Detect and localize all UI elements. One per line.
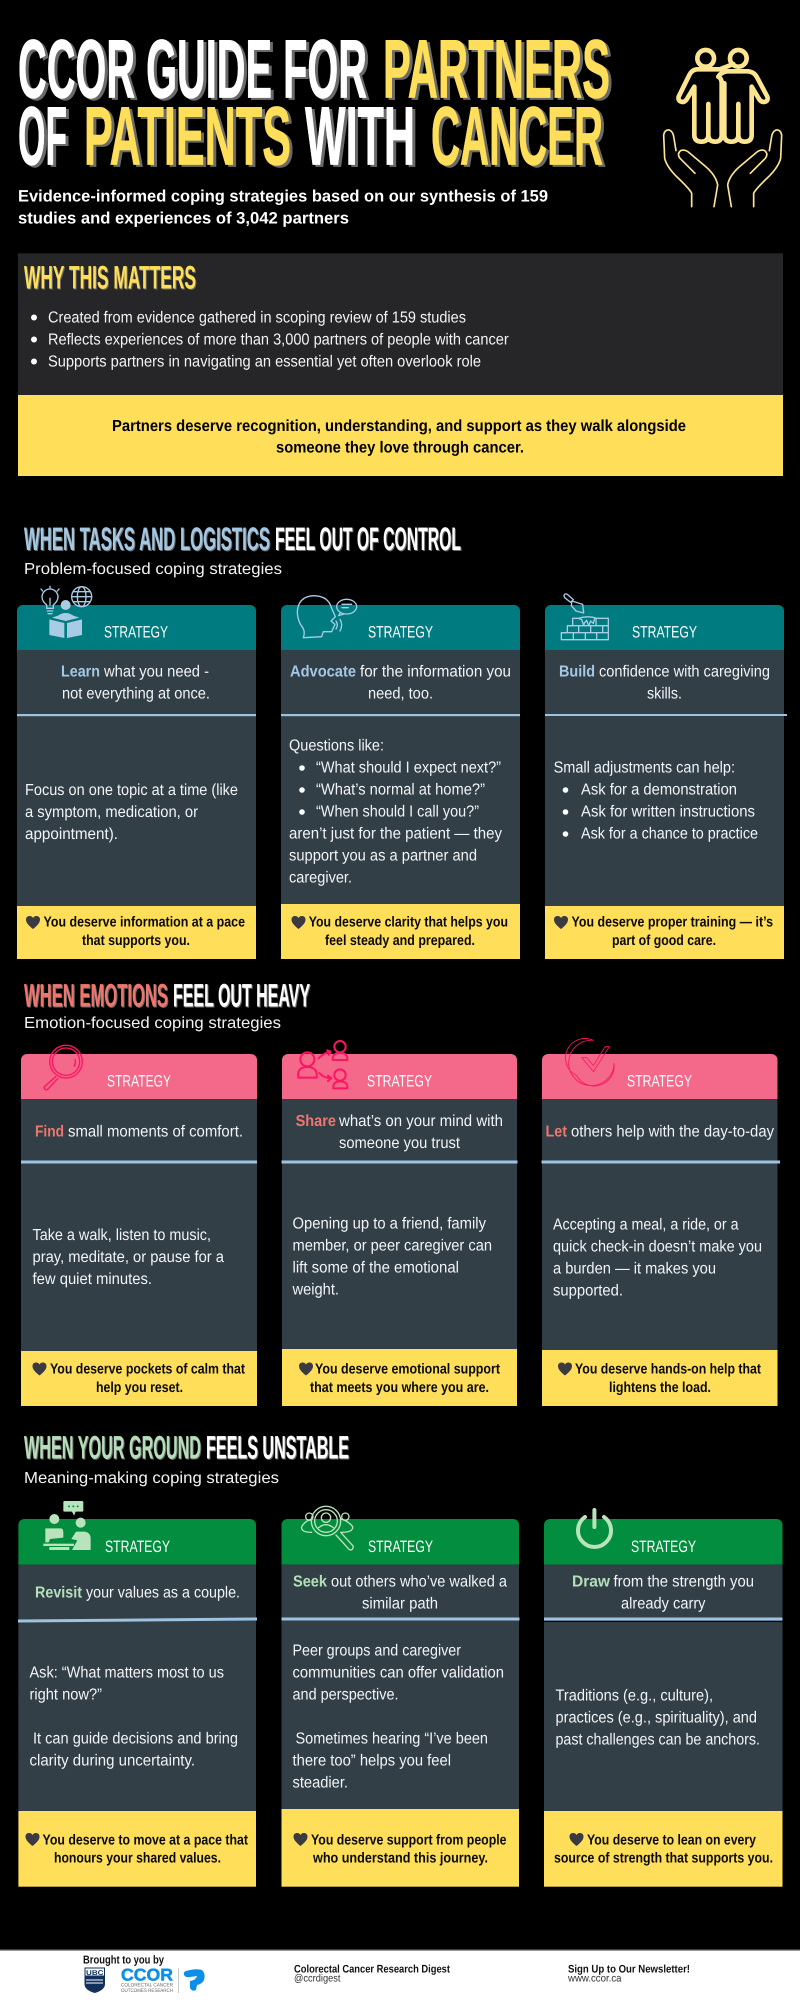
panel: advocate	[281, 596, 520, 959]
card title	[559, 664, 770, 703]
logo: colon icon	[184, 1969, 205, 1991]
card body	[292, 1643, 504, 1792]
card title: someone you trust	[339, 1135, 461, 1152]
card footer: You deserve proper training — it’s	[572, 915, 773, 931]
section heading: tasks and logistics: WHEN TASKS AND LOGISTICS	[24, 521, 270, 557]
card footer: who understand this journey.	[312, 1850, 488, 1866]
card footer: You deserve pockets of calm that	[50, 1362, 245, 1378]
callout: partners deserve recognition: Partners deserve recognition, understanding, and support as they walk alongside	[112, 418, 686, 435]
card title: small moments of comfort.	[68, 1124, 243, 1141]
strategy label: STRATEGY	[627, 1073, 692, 1091]
title	[18, 22, 610, 182]
icon: speaking head	[297, 596, 357, 638]
card body: Traditions (e.g., culture),	[556, 1687, 713, 1704]
card title: already carry	[621, 1596, 706, 1613]
panel: learn	[17, 586, 256, 959]
subtitle: Evidence-informed coping strategies based on our synthesis of 159	[18, 188, 548, 206]
logo: UBC shield	[84, 1968, 105, 1993]
card title	[61, 664, 210, 703]
logo: CCOR wordmark	[121, 1966, 173, 1994]
card title	[290, 664, 511, 703]
card body	[25, 782, 238, 843]
card footer: You deserve emotional support	[315, 1362, 500, 1378]
card title: for the information you	[360, 664, 511, 681]
card body: pray, meditate, or pause for a	[32, 1249, 224, 1266]
card title	[572, 1574, 754, 1613]
title: WITH	[305, 90, 415, 182]
card title: Revisit	[35, 1585, 83, 1602]
card body: caregiver.	[289, 870, 352, 887]
card body: Small adjustments can help:	[554, 760, 735, 777]
icon: book, bulb and globe	[41, 586, 92, 638]
card body: weight.	[292, 1282, 339, 1299]
card body	[554, 760, 758, 843]
card body: a burden — it makes you	[553, 1261, 716, 1278]
card footer	[545, 906, 784, 959]
callout: partners deserve recognition	[18, 395, 783, 476]
card body: “What’s normal at home?”	[316, 782, 485, 799]
logo: UBC shield: UBC	[86, 1970, 104, 1977]
card footer: that meets you where you are.	[310, 1380, 489, 1396]
card title: from the strength you	[614, 1574, 754, 1591]
panel: share	[282, 1041, 518, 1406]
strategy label: STRATEGY	[368, 1538, 433, 1556]
card body: there too” helps you feel	[292, 1753, 451, 1770]
card footer: honours your shared values.	[54, 1850, 221, 1866]
card body: few quiet minutes.	[32, 1271, 152, 1288]
panel: why this matters	[18, 253, 783, 395]
card body	[289, 738, 502, 887]
card body: Opening up to a friend, family	[292, 1216, 486, 1233]
strategy label: STRATEGY	[107, 1073, 171, 1091]
subtitle: studies and experiences of 3,042 partners	[18, 210, 349, 228]
card body	[556, 1687, 760, 1748]
brought to you by: Brought to you by	[83, 1954, 164, 1966]
panel: let	[542, 1038, 780, 1406]
card footer: lightens the load.	[609, 1380, 711, 1396]
card footer: part of good care.	[612, 933, 716, 949]
card body: clarity during uncertainty.	[30, 1753, 195, 1770]
footer band	[0, 1949, 800, 2000]
card body: right now?”	[30, 1687, 102, 1704]
card body: support you as a partner and	[289, 848, 477, 865]
section subtitle: emotion-focused: Emotion-focused coping strategies	[24, 1015, 281, 1032]
card body: quick check-in doesn’t make you	[553, 1239, 762, 1256]
newsletter	[567, 1964, 690, 1985]
card body	[292, 1216, 492, 1299]
card title: others help with the day-to-day	[571, 1124, 774, 1141]
bullet list	[31, 310, 509, 371]
panel: seek	[282, 1506, 520, 1887]
card body	[32, 1227, 224, 1288]
heading: why this matters: WHY THIS MATTERS	[24, 259, 196, 295]
strategy label: STRATEGY	[367, 1073, 432, 1091]
card footer: You deserve support from people	[311, 1832, 506, 1848]
card body: “What should I expect next?”	[316, 760, 501, 777]
panel: build	[545, 594, 787, 959]
card footer	[21, 1351, 257, 1406]
card body: “When should I call you?”	[316, 804, 479, 821]
card footer: You deserve hands-on help that	[575, 1362, 761, 1378]
card footer	[542, 1350, 778, 1406]
digest contact: Colorectal Cancer Research Digest	[294, 1964, 450, 1976]
section subtitle: problem-focused: Problem-focused coping strategies	[24, 561, 282, 578]
card body: Ask: “What matters most to us	[30, 1665, 224, 1682]
card title: need, too.	[368, 686, 433, 703]
title: PATIENTS	[84, 90, 291, 182]
card body: Accepting a meal, a ride, or a	[553, 1217, 739, 1234]
bullet list: Supports partners in navigating an essential yet often overlook role	[48, 354, 481, 371]
card body: member, or peer caregiver can	[292, 1238, 492, 1255]
card title: Draw	[572, 1574, 611, 1591]
icon: power symbol	[578, 1510, 611, 1547]
text: FEELS UNSTABLE	[206, 1429, 349, 1465]
subtitle	[18, 188, 548, 228]
card body: lift some of the emotional	[292, 1260, 459, 1277]
panel: find	[21, 1045, 257, 1406]
icon: two people talking at a desk	[43, 1501, 91, 1550]
card title: not everything at once.	[62, 686, 210, 703]
newsletter: Sign Up to Our Newsletter!	[568, 1964, 690, 1976]
card body: Ask for a chance to practice	[581, 826, 758, 843]
digest contact: @ccrdigest	[294, 1973, 341, 1985]
card title	[293, 1574, 507, 1613]
logo: CCOR wordmark: OUTCOMES RESEARCH	[121, 1988, 173, 1994]
logo: CCOR wordmark: CCOR	[121, 1966, 173, 1984]
card body: appointment).	[25, 826, 118, 843]
icon: partners held in two hands	[664, 50, 782, 207]
panel: draw	[544, 1510, 782, 1887]
icon: searching for people	[302, 1506, 353, 1550]
card body: Ask for written instructions	[581, 804, 755, 821]
card body: supported.	[553, 1283, 623, 1300]
card body: practices (e.g., spirituality), and	[556, 1709, 757, 1726]
card title: what’s on your mind with	[338, 1113, 503, 1130]
card title: Find	[35, 1124, 64, 1141]
card title: Seek	[293, 1574, 327, 1591]
panel: revisit	[18, 1501, 257, 1887]
text: FEEL OUT HEAVY	[173, 978, 310, 1014]
bullet list: Reflects experiences of more than 3,000 partners of people with cancer	[48, 332, 509, 349]
card title: confidence with caregiving	[599, 664, 770, 681]
card footer: You deserve information at a pace	[44, 915, 245, 931]
icon: check mark in circle	[565, 1038, 614, 1086]
card footer	[281, 904, 520, 959]
card body: steadier.	[292, 1775, 348, 1792]
section subtitle: meaning-making: Meaning-making coping strategies	[24, 1470, 279, 1487]
card body: aren’t just for the patient — they	[289, 826, 502, 843]
section heading: emotions: WHEN EMOTIONS	[24, 978, 168, 1014]
card title: Build	[559, 664, 595, 681]
card body: communities can offer validation	[292, 1665, 504, 1682]
card title: skills.	[647, 686, 682, 703]
card body: Focus on one topic at a time (like	[25, 782, 238, 799]
section heading: ground: WHEN YOUR GROUND	[24, 1429, 201, 1465]
card body: It can guide decisions and bring	[33, 1731, 238, 1748]
card title: Learn	[61, 664, 100, 681]
card body: Sometimes hearing “I’ve been	[296, 1731, 488, 1748]
card body: Ask for a demonstration	[581, 782, 737, 799]
logo: CCOR wordmark: COLORECTAL CANCER	[121, 1982, 173, 1988]
card footer	[18, 1811, 256, 1887]
card footer	[282, 1809, 519, 1887]
title: CCOR GUIDE FOR	[18, 22, 367, 116]
card body: a symptom, medication, or	[25, 804, 199, 821]
icon: people sharing	[298, 1041, 347, 1088]
card title	[35, 1585, 240, 1602]
card title: similar path	[362, 1596, 438, 1613]
card footer: You deserve clarity that helps you	[309, 915, 508, 931]
title: OF	[18, 90, 67, 182]
icon: magnifying glass	[44, 1045, 82, 1090]
card footer: feel steady and prepared.	[325, 933, 475, 949]
card body: Peer groups and caregiver	[292, 1643, 462, 1660]
card body	[553, 1217, 762, 1300]
card body: and perspective.	[292, 1687, 398, 1704]
card footer: that supports you.	[82, 933, 190, 949]
newsletter: www.ccor.ca	[567, 1973, 622, 1985]
card footer	[544, 1811, 782, 1887]
card title: Advocate	[290, 664, 356, 681]
strategy label: STRATEGY	[105, 1538, 170, 1556]
strategy label: STRATEGY	[631, 1538, 696, 1556]
icon: trowel and brick wall	[561, 594, 608, 640]
bullet list: Created from evidence gathered in scoping review of 159 studies	[48, 310, 466, 327]
strategy label: STRATEGY	[104, 624, 168, 642]
card body	[30, 1665, 238, 1770]
strategy label: STRATEGY	[368, 624, 433, 642]
card body: Take a walk, listen to music,	[32, 1227, 211, 1244]
digest contact	[294, 1964, 450, 1985]
card footer: You deserve to move at a pace that	[42, 1832, 248, 1848]
title: CANCER	[431, 90, 603, 182]
card body: past challenges can be anchors.	[556, 1731, 760, 1748]
callout: partners deserve recognition: someone they love through cancer.	[276, 440, 524, 457]
card footer	[282, 1349, 517, 1406]
card title: out others who’ve walked a	[331, 1574, 507, 1591]
card title	[296, 1113, 503, 1152]
card body: Questions like:	[289, 738, 384, 755]
card footer	[17, 906, 256, 959]
card title: your values as a couple.	[86, 1585, 240, 1602]
strategy label: STRATEGY	[632, 624, 697, 642]
text: FEEL OUT OF CONTROL	[275, 521, 461, 557]
card title: Share	[296, 1113, 336, 1130]
card title: what you need -	[103, 664, 209, 681]
card footer: You deserve to lean on every	[587, 1832, 756, 1848]
card footer: help you reset.	[96, 1380, 183, 1396]
card title: Let	[546, 1124, 568, 1141]
